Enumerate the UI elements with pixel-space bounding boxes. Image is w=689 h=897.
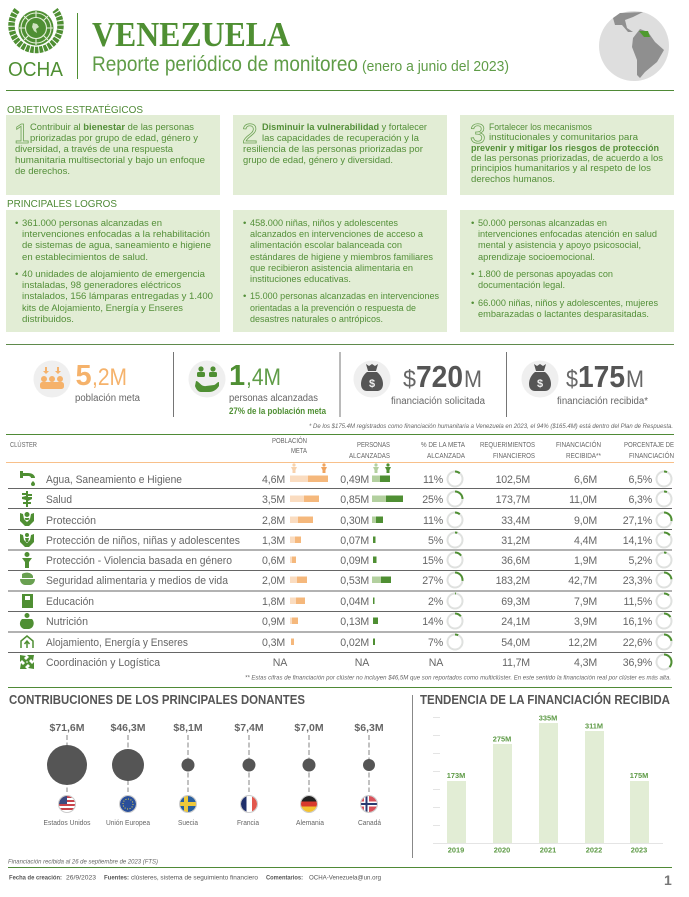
panel: logros 3: aprendizaje socioemocional. — [478, 252, 595, 263]
logo: OCHA: OCHA — [8, 59, 64, 81]
donor: Canadá: $6,3M — [354, 722, 384, 734]
panel: objetivo 2 — [233, 115, 447, 195]
icon: hands protecting person — [20, 512, 34, 526]
row: Protección: 9,0M — [574, 515, 597, 527]
row: Agua, Saneamiento e Higiene: Agua, Saneamiento e Higiene — [46, 474, 182, 486]
row: Seguridad alimentaria y medios de vida — [20, 572, 672, 588]
panel: logros 1: 361.000 personas alcanzadas en — [22, 218, 162, 229]
panel: logros 3: intervenciones enfocadas atención en salud — [478, 229, 657, 240]
row: Protección - Violencia basada en género: 0,6M — [262, 555, 285, 567]
donor: Estados Unidos: Estados Unidos — [44, 818, 91, 827]
panel: logros 2: alimentación escolar balanceada con — [250, 240, 402, 251]
footer: Fecha de creación: — [9, 874, 62, 882]
subtitle dates: (enero a junio del 2023) — [362, 59, 509, 75]
row: Agua, Saneamiento e Higiene: 0,49M — [340, 474, 369, 486]
row: Seguridad alimentaria y medios de vida: 23,3% — [623, 575, 653, 587]
KPI: financiación solicitada — [354, 359, 485, 407]
heading: contribuciones: CONTRIBUCIONES DE LOS PRINCIPALES DONANTES — [9, 692, 305, 707]
panel: logros 3: 66.000 niñas, niños y adolescentes, mujeres — [478, 298, 658, 309]
icon: book — [22, 594, 33, 608]
KPI: financiación solicitada: financiación solicitada — [391, 396, 485, 407]
icon: mother and child — [20, 613, 34, 629]
KPI: financiación recibida — [522, 359, 648, 407]
panel: logros 2: estándares de higiene y miembros familiares — [250, 252, 433, 263]
footnote: funding: * De los $175.4M registrados como financiación humanitaria a Venezuela en 2023, el 94% ($165.4M) está dentro del Plan de Respuesta. — [309, 424, 673, 430]
table header: POBLACIÓN — [272, 436, 307, 445]
panel: logros 3: • — [471, 218, 474, 229]
KPI: financiación solicitada: $ — [403, 366, 416, 393]
panel: logros 1: en establecimientos de salud. — [22, 252, 148, 263]
row: Alojamiento, Energía y Enseres: 0,3M — [262, 637, 285, 649]
icon: person — [22, 552, 32, 568]
row: Seguridad alimentaria y medios de vida: 42,7M — [568, 575, 597, 587]
row: Protección: 27,1% — [623, 515, 653, 527]
donor: Unión Europea: $46,3M — [110, 722, 146, 734]
row: Alojamiento, Energía y Enseres: 7% — [428, 637, 444, 649]
table header: REQUERIMIENTOS — [480, 440, 535, 449]
panel: logros 2: 15.000 personas alcanzadas en intervenciones — [250, 291, 439, 302]
table header: RECIBIDA** — [566, 451, 601, 460]
KPI: financiación solicitada: 720 — [416, 359, 463, 394]
row: Salud: 6,3% — [628, 494, 653, 506]
footer: OCHA-Venezuela@un.org — [309, 874, 381, 882]
row: Salud: 3,5M — [262, 494, 285, 506]
KPI: población meta: población meta — [75, 393, 140, 404]
table header: FINANCIACIÓN — [556, 440, 601, 449]
row: Agua, Saneamiento e Higiene: 11% — [423, 474, 444, 486]
number 3: 3 — [470, 118, 486, 149]
row: Agua, Saneamiento e Higiene — [20, 471, 672, 486]
donor: Canadá — [354, 722, 384, 827]
row: Seguridad alimentaria y medios de vida: 27% — [422, 575, 444, 587]
row: Protección: 0,30M — [340, 515, 369, 527]
row: Agua, Saneamiento e Higiene: 4,6M — [262, 474, 285, 486]
KPI: personas alcanzadas: personas alcanzadas — [229, 393, 318, 404]
panel: logros 1: distribuidos. — [22, 314, 74, 325]
objetivo 2 text — [243, 122, 428, 166]
heading: principales logros: PRINCIPALES LOGROS — [7, 199, 117, 210]
row: Salud: 25% — [422, 494, 444, 506]
panel: logros 2: • — [243, 291, 246, 302]
panel: logros 1: instaladas, 98 generadores eléctricos — [22, 280, 181, 291]
objetivo 3 text — [471, 122, 663, 185]
number 1: 1 — [14, 118, 30, 149]
KPI: personas alcanzadas: 27% de la población meta — [229, 406, 327, 417]
flag: France — [241, 796, 257, 812]
donor: Suecia: Suecia — [178, 818, 199, 827]
panel: logros 1: • — [15, 218, 18, 229]
objetivo 1 text: diversidad, a través de una respuesta — [15, 144, 174, 155]
row: Protección - Violencia basada en género: 5,2% — [628, 555, 653, 567]
subtitle: Reporte periódico de monitoreo — [92, 53, 358, 76]
row: Nutrición: 14% — [422, 616, 444, 628]
objetivo 2 text: Disminuir la vulnerabilidad y fortalecer — [262, 122, 428, 133]
icon: hand and people — [188, 360, 226, 398]
panel: logros 3: embarazadas o lactantes desparasitadas. — [478, 309, 649, 320]
chart: funding trend — [433, 714, 663, 854]
panel: logros 2 — [233, 210, 447, 332]
table header: FINANCIACIÓN — [629, 451, 674, 460]
row: Educación: 11,5% — [623, 596, 653, 608]
donor: Francia: Francia — [237, 818, 260, 827]
panel: logros 3: 50.000 personas alcanzadas en — [478, 218, 607, 229]
panel: logros 2: 458.000 niñas, niños y adolescentes — [250, 218, 398, 229]
KPI: financiación recibida: financiación recibida* — [557, 396, 648, 407]
donor: Suecia — [173, 722, 203, 827]
KPI: financiación recibida: $ — [566, 366, 578, 393]
objetivo 3 text: principios humanitarios y al respeto de los — [471, 163, 651, 174]
flag: Norway-style — [361, 796, 377, 812]
table header: % DE LA META — [421, 440, 465, 449]
row: Protección de niños, niñas y adolescentes — [20, 532, 672, 548]
objetivo 1 text: priorizadas por grupo de edad, género y — [30, 133, 198, 144]
icon: money bag: $ — [537, 378, 543, 390]
objetivo 3 text: institucionales y comunitarios para — [489, 132, 639, 143]
panel: logros 3: documentación legal. — [478, 280, 565, 291]
row: Agua, Saneamiento e Higiene: 102,5M — [496, 474, 530, 486]
icons: target and reached people legend — [291, 463, 391, 473]
panel: logros 3 — [460, 210, 674, 332]
row: Coordinación y Logística: 11,7M — [502, 657, 530, 669]
row: Coordinación y Logística: 4,3M — [574, 657, 597, 669]
objetivo 3 text: Fortalecer los mecanismos — [489, 122, 592, 133]
donor: Estados Unidos: $71,6M — [49, 722, 85, 734]
icon: hands protecting child — [20, 533, 34, 547]
row: Salud: Salud — [46, 494, 72, 506]
KPI: población meta: ,2M — [92, 364, 127, 391]
bar 2020: 2020 — [494, 846, 510, 854]
table header: META — [291, 446, 307, 455]
donor: Francia — [234, 722, 264, 827]
heading: objetivos estratégicos: OBJETIVOS ESTRATÉGICOS — [7, 103, 143, 116]
row: Agua, Saneamiento e Higiene: 6,6M — [574, 474, 597, 486]
donor: Francia: $7,4M — [234, 722, 264, 734]
icon: shelter — [21, 636, 33, 648]
bar 2023: 2023 — [631, 846, 647, 854]
KPI: población meta — [34, 360, 140, 404]
KPI: financiación recibida: 175 — [578, 359, 625, 394]
row: Educación: 69,3M — [501, 596, 530, 608]
row: Alojamiento, Energía y Enseres: 0,02M — [340, 637, 369, 649]
row: Nutrición — [20, 613, 671, 629]
row: Educación: 0,04M — [340, 596, 369, 608]
donor: Alemania — [294, 722, 325, 827]
bar 2022: 311M — [585, 722, 603, 730]
row: Protección - Violencia basada en género: Protección - Violencia basada en género — [46, 555, 232, 567]
objetivo 1 text: humanitaria multisectorial y bajo un enfoque — [15, 155, 205, 166]
row: Salud — [22, 491, 672, 507]
row: Salud: 173,7M — [496, 494, 530, 506]
bar 2019 — [447, 771, 466, 854]
row: Protección de niños, niñas y adolescentes: 4,4M — [574, 535, 597, 547]
row: Seguridad alimentaria y medios de vida: 183,2M — [496, 575, 530, 587]
note: funding date: Financiación recibida al 26 de septiembre de 2023 (FTS) — [8, 858, 158, 866]
objetivo 2 text: grupo de edad, género y diversidad. — [243, 155, 393, 166]
row: Protección: Protección — [46, 515, 96, 527]
donor: Estados Unidos — [44, 722, 91, 827]
row: Coordinación y Logística — [20, 654, 672, 670]
row: Salud: 0,85M — [340, 494, 369, 506]
row: Protección de niños, niñas y adolescentes: 1,3M — [262, 535, 285, 547]
footnote: multicluster: ** Estas cifras de financiación por clúster no incluyen $46,5M que son reportados como multiclúster. En este sentido la financiación real por clúster es más alta. — [245, 676, 671, 682]
panel: logros 2: orientadas a la prevención o respuesta de — [250, 303, 416, 314]
bar 2023 — [630, 771, 649, 854]
objetivo 3 text: prevenir y mitigar los riesgos de protección — [471, 143, 659, 154]
bar 2021: 335M — [539, 714, 557, 722]
donor: Unión Europea — [106, 722, 151, 827]
row: Protección - Violencia basada en género: 1,9M — [574, 555, 597, 567]
logo: OCHA — [8, 10, 64, 81]
icon: globe with Venezuela highlighted — [599, 11, 669, 81]
bar 2022: 2022 — [586, 846, 602, 854]
row: Coordinación y Logística: NA — [355, 657, 370, 669]
row: Alojamiento, Energía y Enseres: 22,6% — [623, 637, 653, 649]
panel: logros 1: intervenciones enfocadas a la rehabilitación — [22, 229, 210, 240]
icon: people target — [34, 360, 70, 398]
bar 2020: 275M — [493, 734, 511, 744]
row: Coordinación y Logística: NA — [273, 657, 288, 669]
table header: FINANCIEROS — [493, 451, 535, 460]
bar 2019: 173M — [447, 771, 465, 780]
chart: donor contributions — [44, 722, 384, 827]
table header: ALCANZADAS — [349, 451, 390, 460]
icon: water tap — [20, 471, 35, 486]
number 2: 2 — [242, 118, 258, 149]
row: Protección: 11% — [423, 515, 444, 527]
row: Educación: 7,9M — [574, 596, 597, 608]
footer — [9, 874, 381, 882]
row: Seguridad alimentaria y medios de vida: Seguridad alimentaria y medios de vida — [46, 575, 228, 587]
row: Nutrición: Nutrición — [46, 616, 88, 628]
row: Educación: 2% — [428, 596, 444, 608]
row: Nutrición: 24,1M — [501, 616, 530, 628]
page number: 1 — [664, 872, 672, 888]
row: Alojamiento, Energía y Enseres: 54,0M — [501, 637, 530, 649]
panel: logros 1: instalados, 156 lámparas entregadas y 1.400 — [22, 291, 213, 302]
row: Protección — [20, 512, 672, 528]
panel: logros 3: 1.800 de personas apoyadas con — [478, 269, 613, 280]
panel: objetivo 3 — [460, 115, 674, 195]
panel: logros 1: de sistemas de agua, saneamiento e higiene — [22, 240, 211, 251]
bar 2022 — [585, 722, 604, 854]
bar 2019: 2019 — [448, 846, 464, 854]
row: Protección - Violencia basada en género: 36,6M — [501, 555, 530, 567]
row: Educación: Educación — [46, 596, 94, 608]
flag: USA — [59, 796, 75, 810]
row: Seguridad alimentaria y medios de vida: 0,53M — [340, 575, 369, 587]
row: Protección - Violencia basada en género: 15% — [422, 555, 444, 567]
table header: CLÚSTER — [10, 440, 37, 449]
bar 2021: 2021 — [540, 846, 556, 854]
row: Salud: 11,0M — [569, 494, 597, 506]
donor: Suecia: $8,1M — [173, 722, 203, 734]
icon: arrows converging — [20, 655, 34, 669]
table row dividers — [8, 488, 672, 652]
icon: UN emblem — [11, 10, 60, 50]
row: Alojamiento, Energía y Enseres: 12,2M — [568, 637, 597, 649]
panel: logros 3: mental y asistencia y apoyo psicosocial, — [478, 240, 641, 251]
panel: logros 2: alcanzados en intervenciones de acceso a — [250, 229, 424, 240]
objetivo 1 text — [15, 122, 205, 177]
row: Nutrición: 16,1% — [623, 616, 653, 628]
donor: Unión Europea: Unión Europea — [106, 818, 151, 827]
objetivo 3 text: de las personas priorizadas, de acuerdo a los — [471, 153, 663, 164]
row: Protección de niños, niñas y adolescentes: 0,07M — [340, 535, 369, 547]
donor: Alemania: Alemania — [296, 818, 325, 827]
objetivo 2 text: las capacidades de recuperación y la — [262, 133, 420, 144]
KPI: población meta: 5 — [76, 360, 92, 392]
title: VENEZUELA — [92, 15, 291, 54]
panel: logros 1: 40 unidades de alojamiento de emergencia — [22, 269, 206, 280]
panel: logros 3: • — [471, 269, 474, 280]
flag: Sweden — [180, 796, 196, 812]
row: Alojamiento, Energía y Enseres: Alojamiento, Energía y Enseres — [46, 637, 189, 649]
footer: Comentarios: — [266, 874, 303, 882]
row: Seguridad alimentaria y medios de vida: 2,0M — [262, 575, 285, 587]
KPI: personas alcanzadas — [188, 360, 327, 417]
footer: Fuentes: — [104, 874, 129, 882]
flag: Germany — [301, 796, 317, 812]
objetivo 3 text: derechos humanos. — [471, 174, 555, 185]
panel: logros 1 — [6, 210, 220, 332]
panel: logros 1: kits de Alojamiento, Energía y Enseres — [22, 303, 183, 314]
objetivo 2 text: resiliencia de las personas priorizadas por — [243, 144, 424, 155]
panel: logros 2: • — [243, 218, 246, 229]
row: Alojamiento, Energía y Enseres — [21, 634, 672, 650]
row: Protección: 33,4M — [501, 515, 530, 527]
row: Coordinación y Logística: Coordinación y Logística — [46, 657, 160, 669]
panel: objetivo 1 — [6, 115, 220, 195]
row: Protección - Violencia basada en género: 0,09M — [340, 555, 369, 567]
row: Protección de niños, niñas y adolescentes: 5% — [428, 535, 444, 547]
bar 2020 — [493, 734, 512, 854]
objetivo 1 text: Contribuir al bienestar de las personas — [30, 122, 194, 133]
row: Nutrición: 0,9M — [262, 616, 285, 628]
panel: logros 2: que recibieron asistencia alimentaria en — [250, 263, 413, 274]
row: Protección de niños, niñas y adolescentes: 14,1% — [623, 535, 653, 547]
donor: Alemania: $7,0M — [294, 722, 324, 734]
KPI: financiación recibida: M — [626, 366, 644, 393]
row: Educación: 1,8M — [262, 596, 285, 608]
icon: food bowl — [20, 573, 35, 585]
footer: clústeres, sistema de seguimiento financiero — [131, 874, 258, 882]
table header: PERSONAS — [357, 440, 390, 449]
table header: PORCENTAJE DE — [624, 440, 674, 449]
KPI: financiación solicitada: M — [464, 366, 482, 393]
row: Protección de niños, niñas y adolescentes: Protección de niños, niñas y adolescentes — [46, 535, 241, 547]
panel: logros 3: • — [471, 298, 474, 309]
icon: caduceus — [22, 491, 32, 507]
bar 2023: 175M — [630, 771, 648, 780]
row: Nutrición: 3,9M — [574, 616, 597, 628]
KPI: personas alcanzadas: 1 — [229, 360, 245, 392]
bar 2021 — [539, 714, 558, 854]
flag: EU — [120, 796, 136, 812]
donor: Canadá: Canadá — [358, 818, 382, 827]
panel: logros 1: • — [15, 269, 18, 280]
row: Coordinación y Logística: 36,9% — [623, 657, 653, 669]
row: Coordinación y Logística: NA — [429, 657, 444, 669]
row: Protección - Violencia basada en género — [22, 552, 672, 568]
footer: 26/9/2023 — [66, 874, 96, 882]
table header — [10, 436, 674, 460]
row: Protección de niños, niñas y adolescentes: 31,2M — [501, 535, 530, 547]
objetivo 1 text: de derechos. — [15, 166, 70, 177]
row: Protección: 2,8M — [262, 515, 285, 527]
icon: money bag: $ — [369, 378, 375, 390]
panel: logros 2: instituciones educativas. — [250, 274, 351, 285]
row: Nutrición: 0,13M — [340, 616, 369, 628]
row: Educación — [22, 594, 672, 608]
panel: logros 2: desastres naturales o antrópicos. — [250, 314, 383, 325]
row: Agua, Saneamiento e Higiene: 6,5% — [628, 474, 653, 486]
KPI: personas alcanzadas: ,4M — [246, 364, 281, 391]
table header: ALCANZADA — [427, 451, 465, 460]
